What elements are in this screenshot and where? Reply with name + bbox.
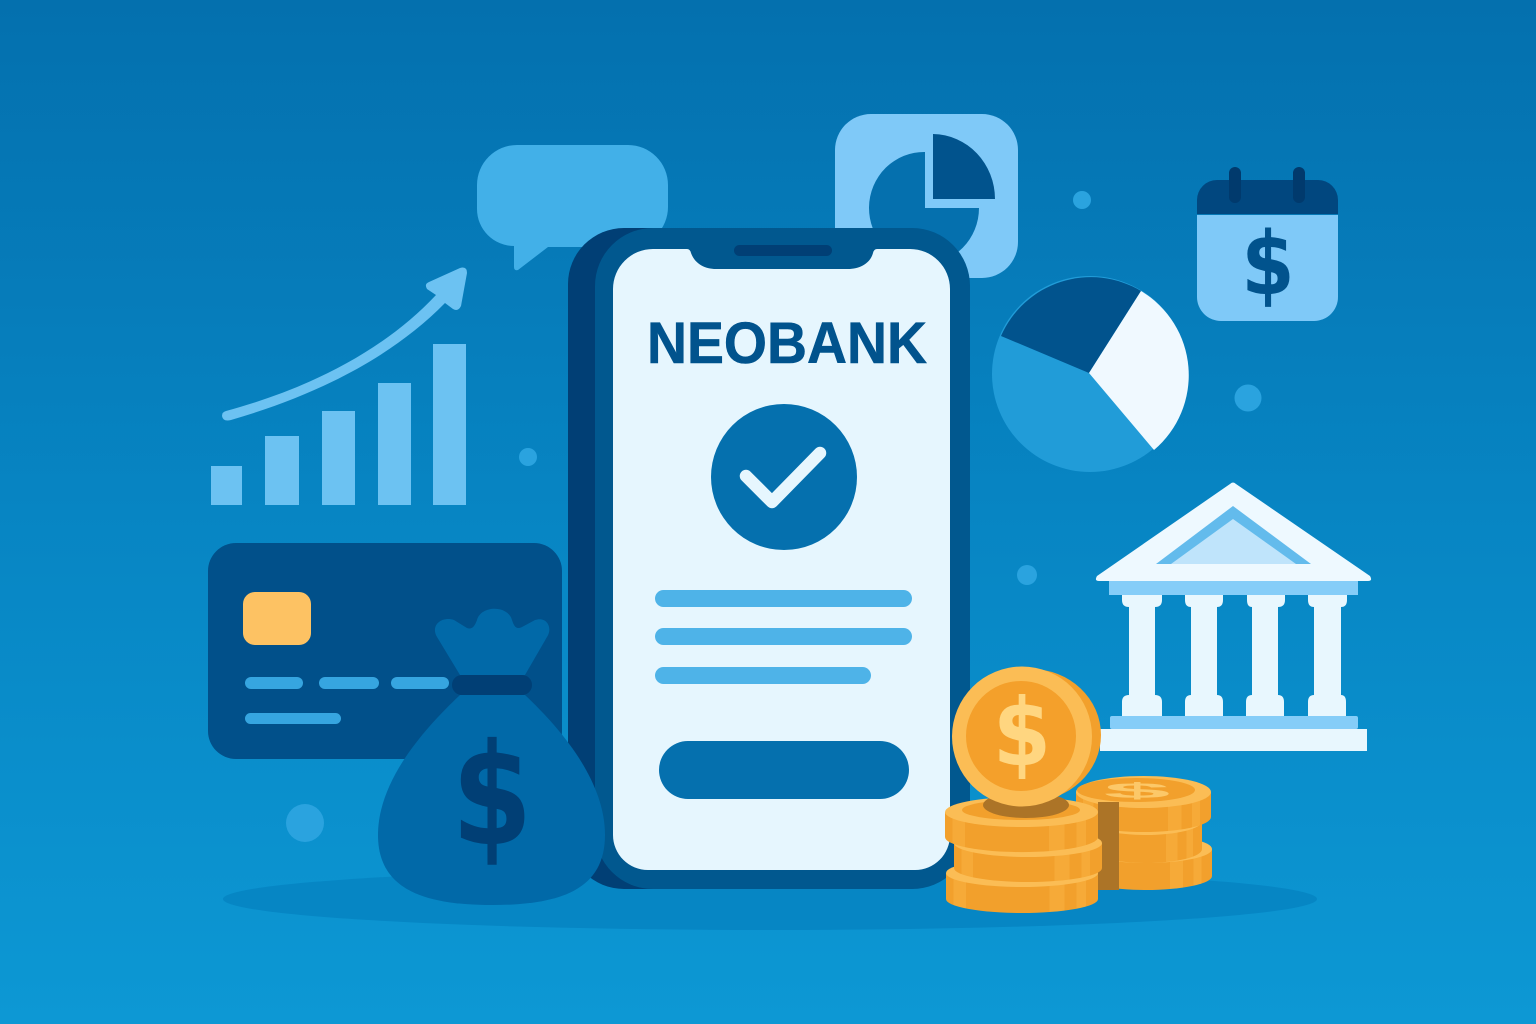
bag body (378, 695, 605, 905)
right stack bottom coin (1080, 835, 1212, 890)
growth arrow (222, 268, 467, 420)
columns (1122, 595, 1347, 716)
ground shadow (223, 868, 1317, 930)
phone speaker (734, 245, 832, 256)
pie body (869, 152, 979, 264)
bar chart with growth arrow (211, 268, 467, 505)
white slice (1089, 291, 1189, 450)
calendar body (1197, 215, 1338, 321)
coin inner disc (966, 681, 1076, 791)
calendar icon (1197, 167, 1338, 321)
phone back edge (568, 228, 868, 889)
right stack middle coin (1090, 807, 1202, 863)
left stack bottom coin (946, 859, 1098, 913)
base step (1100, 729, 1367, 751)
phone screen (613, 249, 950, 870)
check circle (711, 404, 857, 550)
verified check icon (711, 404, 857, 550)
upright dollar coin (952, 666, 1101, 806)
large pie chart (992, 276, 1189, 472)
speech bubble (477, 145, 668, 270)
smartphone (568, 228, 970, 889)
card body (208, 543, 562, 759)
bag tie (452, 675, 532, 695)
plinth (1110, 716, 1358, 729)
bank building (1096, 482, 1371, 751)
phone front frame (595, 228, 970, 889)
roof (1096, 482, 1371, 581)
pediment outline (1156, 506, 1311, 564)
calendar dollar sign: $ (1241, 214, 1295, 315)
card number lines (245, 677, 449, 724)
neobank title: NEOBANK (647, 311, 927, 376)
left stack middle coin (954, 829, 1102, 882)
money bag (378, 609, 605, 905)
app icon: pie chart (835, 114, 1018, 278)
chart bars (211, 344, 466, 505)
pediment fill (1171, 519, 1296, 564)
card chip (243, 592, 311, 645)
coin dollar sign: $ (993, 677, 1051, 787)
pie slice (933, 134, 995, 199)
dark slice (1001, 277, 1141, 373)
bag crown (435, 609, 549, 675)
coin face (952, 666, 1092, 806)
left stack top coin (945, 792, 1098, 852)
calendar header (1197, 180, 1338, 214)
action button (659, 741, 909, 799)
text placeholder lines (655, 590, 912, 684)
decorative dots (286, 191, 1262, 842)
calendar rings (1229, 167, 1305, 203)
entablature (1109, 581, 1358, 595)
flat dollar sign: $ (1104, 779, 1170, 803)
stack shadow (1098, 802, 1119, 890)
bag dollar sign: $ (452, 714, 532, 878)
pie base slice (992, 276, 1188, 472)
credit card (208, 543, 562, 759)
coin contact shadow (983, 792, 1069, 818)
right coin stack (1076, 776, 1212, 890)
coin edge (961, 669, 1101, 801)
check mark (746, 453, 820, 502)
icon tile (835, 114, 1018, 278)
left coin stack (945, 792, 1102, 913)
coin stacks (945, 666, 1212, 913)
